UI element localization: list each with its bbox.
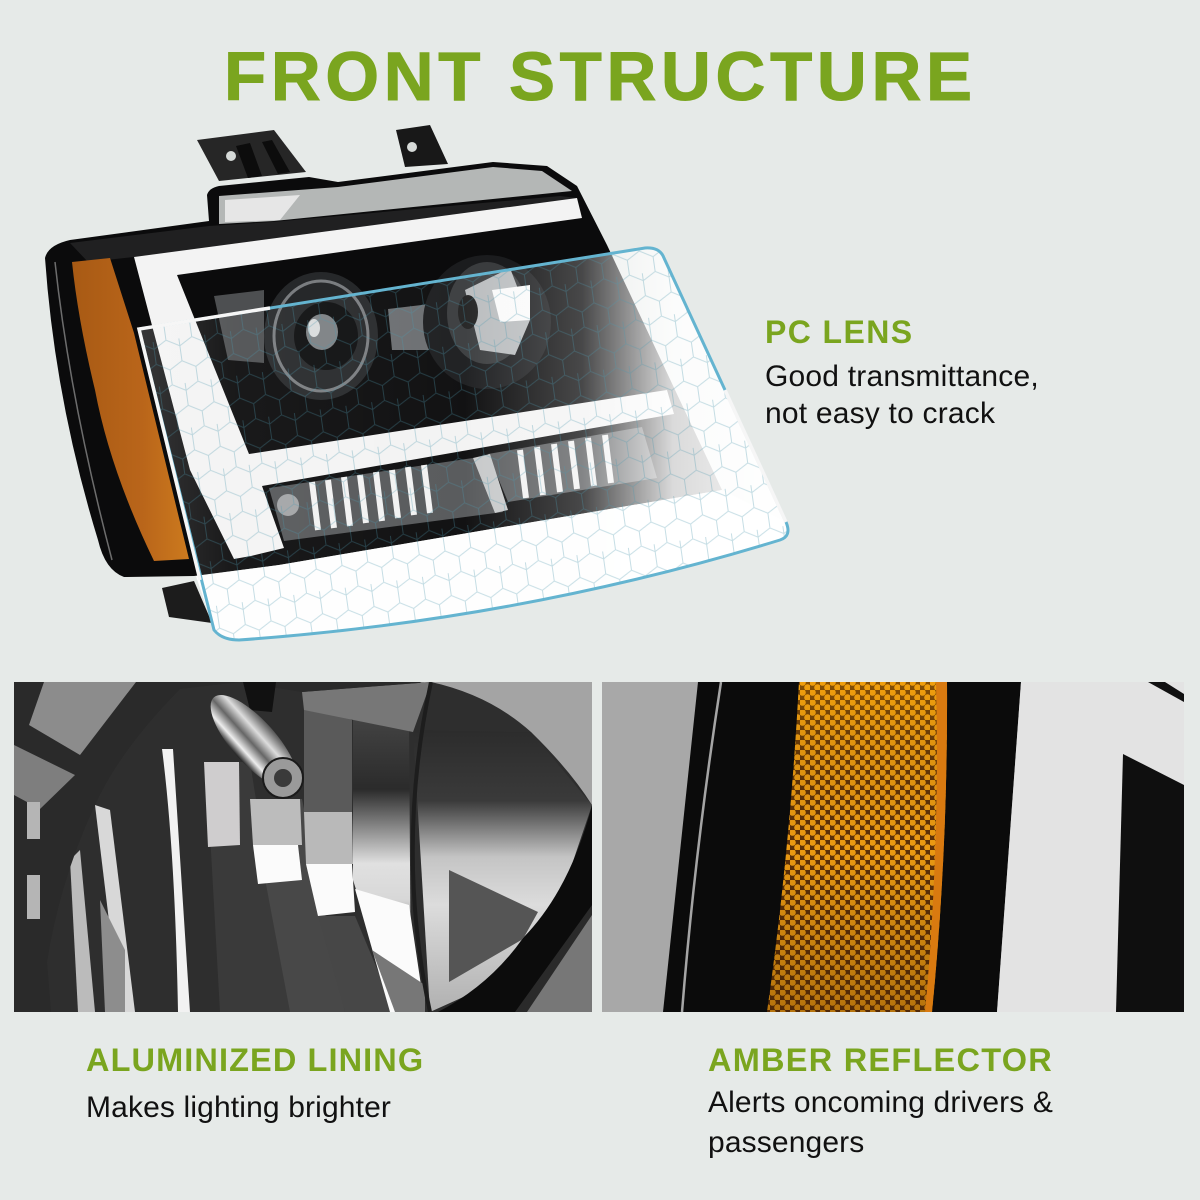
right bezel bbox=[527, 915, 592, 1012]
amber lens bbox=[767, 682, 947, 1012]
title: FRONT STRUCTURE bbox=[224, 38, 972, 115]
grey top-right shell bbox=[420, 682, 592, 810]
description: amber reflector: Alerts oncoming drivers & bbox=[708, 1086, 1053, 1119]
PC lens overlay bbox=[139, 248, 788, 640]
projector left bbox=[214, 272, 378, 400]
band 3 bbox=[266, 799, 345, 1012]
headlight with PC lens bbox=[45, 125, 788, 640]
heading: PC lens: PC LENS bbox=[765, 314, 914, 350]
DRL light bar bbox=[134, 198, 674, 559]
black housing edge bbox=[663, 682, 1021, 1012]
dome light bbox=[413, 730, 592, 1012]
description: aluminized lining: Makes lighting brighter bbox=[86, 1091, 391, 1124]
heading: amber reflector: AMBER REFLECTOR bbox=[708, 1042, 1053, 1078]
photo: amber reflector bbox=[602, 682, 1184, 1012]
description: PC lens: not easy to crack bbox=[765, 397, 996, 430]
lens honeycomb bbox=[139, 248, 788, 640]
description: PC lens: Good transmittance, bbox=[765, 360, 1039, 393]
grey bezel blocks bbox=[29, 682, 136, 755]
left fan streaks bbox=[95, 805, 135, 1012]
white light bar bbox=[997, 682, 1184, 1012]
amber side marker bbox=[72, 258, 189, 561]
reflector bbox=[40, 682, 592, 1012]
projector right bbox=[388, 255, 551, 389]
lens edge glare bbox=[139, 308, 786, 580]
seam bbox=[413, 682, 431, 1012]
mounting brackets bbox=[197, 125, 448, 181]
bulb bbox=[210, 682, 304, 799]
description: amber reflector: passengers bbox=[708, 1126, 864, 1159]
lens outline bbox=[139, 248, 788, 640]
silver top section bbox=[219, 167, 572, 224]
housing bbox=[45, 162, 722, 577]
PC lens callout bbox=[765, 314, 1039, 430]
lower chrome turn signal bbox=[269, 427, 657, 541]
streak bbox=[162, 749, 190, 1012]
amber reflector caption bbox=[708, 1042, 1053, 1159]
amber edge strip bbox=[925, 682, 947, 1012]
band 2 bbox=[206, 762, 290, 1012]
band 5 bbox=[353, 720, 410, 914]
band 4 bbox=[304, 700, 352, 812]
bottom clip bbox=[162, 581, 212, 623]
aluminized lining caption bbox=[86, 1042, 424, 1124]
wedge bbox=[449, 870, 538, 982]
lens lower clear area bbox=[196, 490, 788, 640]
heading: aluminized lining: ALUMINIZED LINING bbox=[86, 1042, 424, 1078]
photo: aluminized lining bbox=[14, 682, 592, 1012]
lens tint bbox=[139, 248, 788, 640]
rim highlight bbox=[55, 262, 112, 560]
